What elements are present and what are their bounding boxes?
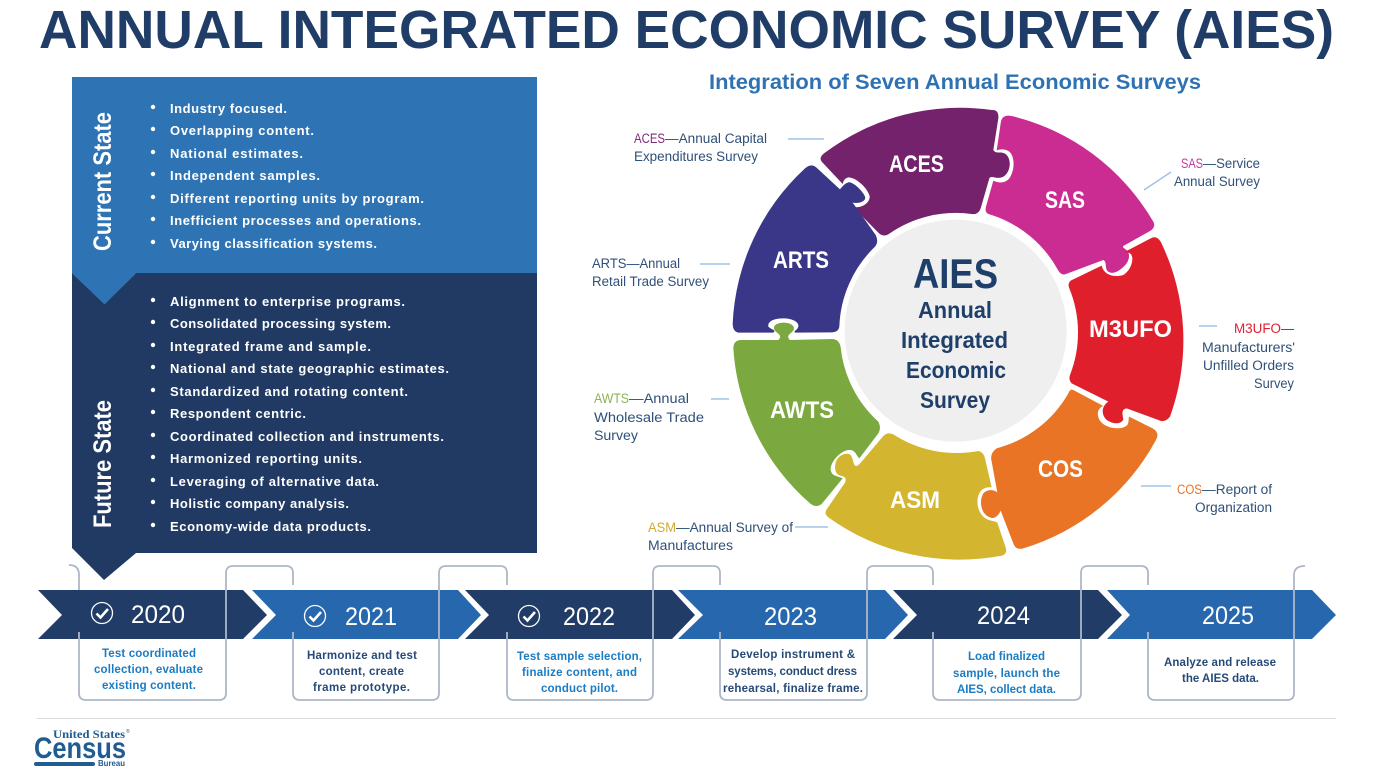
list: future state bullets: Coordinated collection and instruments.	[170, 429, 444, 444]
callout: ACES: ACES	[634, 131, 665, 146]
wheel labels: ASM	[890, 487, 940, 514]
list: future state bullets: National and state geographic estimates.	[170, 361, 449, 376]
brackets connecting steps	[69, 565, 1305, 700]
caption: 2020	[94, 648, 203, 692]
timeline	[38, 565, 1336, 700]
centre text: Integrated	[901, 327, 1008, 353]
callout: COS: COS	[1177, 482, 1202, 497]
list: current state bullets: Independent samples.	[170, 168, 320, 183]
callout: AWTS: Survey	[594, 428, 638, 443]
panel: future state	[72, 272, 537, 580]
list: future state bullets: Holistic company analysis.	[170, 496, 349, 511]
year labels: 2025	[1202, 602, 1254, 630]
callout: AWTS: Wholesale Trade	[594, 410, 704, 425]
wheel labels	[770, 151, 1172, 514]
year labels	[131, 601, 1254, 631]
caption: 2020: collection, evaluate	[94, 664, 203, 676]
chevron: 2021	[252, 590, 481, 639]
callout: ARTS	[592, 256, 730, 289]
list: future state bullets: Harmonized reporting units.	[170, 451, 362, 466]
list: current state bullets: Industry focused.	[170, 101, 287, 116]
list: current state bullets: National estimates.	[170, 146, 303, 161]
callout: M3UFO: M3UFO	[1234, 321, 1281, 336]
caption: 2023: systems, conduct dress	[728, 666, 857, 678]
logo: United States Census Bureau: ®	[126, 728, 130, 735]
year labels: 2024	[977, 602, 1030, 630]
wheel labels: AWTS	[770, 397, 834, 424]
piece: AWTS	[733, 323, 880, 506]
callout: M3UFO: —	[1281, 321, 1294, 336]
wheel labels: ACES	[889, 151, 944, 178]
list: future state bullets: Alignment to enterprise programs.	[170, 294, 405, 309]
year labels: 2021	[345, 603, 397, 631]
icon: check 2022	[518, 606, 540, 626]
callout: SAS: SAS	[1181, 156, 1203, 171]
wheel labels: M3UFO	[1089, 316, 1172, 343]
caption: 2022: Test sample selection,	[517, 651, 642, 663]
list: current state bullets: Inefficient processes and operations.	[170, 213, 421, 228]
caption: 2024: Load finalized	[968, 651, 1045, 663]
callout: M3UFO: Manufacturers'	[1202, 340, 1295, 355]
callout: AWTS: —Annual	[629, 391, 689, 406]
centre circle	[845, 220, 1067, 442]
caption: 2025	[1164, 657, 1276, 685]
callout: SAS: —Service	[1203, 156, 1260, 171]
piece: ACES	[821, 108, 1010, 236]
icon: check 2021	[304, 606, 326, 626]
caption: 2024	[953, 651, 1060, 696]
caption: 2024: AIES, collect data.	[957, 684, 1056, 696]
piece: M3UFO	[1069, 237, 1183, 423]
callout: COS	[1141, 482, 1272, 515]
callout: ACES: Expenditures Survey	[634, 149, 758, 164]
heading: future state: Future State	[89, 400, 117, 528]
callout: COS: Organization	[1195, 500, 1272, 515]
list: future state bullets: Integrated frame and sample.	[170, 339, 371, 354]
piece: ASM	[826, 433, 1006, 560]
arrow: current state pointer	[72, 272, 137, 304]
caption: 2023: Develop instrument &	[731, 649, 855, 661]
callout: SAS: Annual Survey	[1174, 174, 1260, 189]
caption: 2022: conduct pilot.	[541, 683, 618, 695]
piece: ARTS	[733, 165, 877, 333]
callout: ASM: Manufactures	[648, 538, 733, 553]
logo: United States Census Bureau: Census	[34, 732, 126, 765]
callout: ACES	[634, 131, 824, 164]
chevron: 2023	[678, 590, 908, 639]
callout: M3UFO: Unfilled Orders	[1203, 358, 1294, 373]
list: future state bullets: Respondent centric.	[170, 406, 306, 421]
logo: United States Census Bureau: United States	[53, 727, 125, 741]
caption: 2021: Harmonize and test	[307, 650, 417, 662]
list: future state bullets: Consolidated processing system.	[170, 316, 391, 331]
caption: 2020: Test coordinated	[102, 648, 196, 660]
callout: ASM: —Annual Survey of	[676, 520, 793, 535]
callout: ASM: ASM	[648, 520, 676, 535]
chevron: 2024	[893, 590, 1122, 639]
callout: ARTS: ARTS—Annual	[592, 256, 680, 271]
callout: ARTS: Retail Trade Survey	[592, 274, 709, 289]
callout: ASM	[648, 520, 828, 553]
piece: SAS	[986, 116, 1154, 275]
wheel labels: ARTS	[773, 247, 829, 274]
caption: 2021: frame prototype.	[313, 682, 410, 694]
callout: COS: —Report of	[1202, 482, 1272, 497]
list: future state bullets	[151, 294, 449, 534]
chevron: 2025	[1107, 590, 1336, 639]
caption: 2025: the AIES data.	[1182, 673, 1259, 685]
caption: 2024: sample, launch the	[953, 668, 1060, 680]
callout: M3UFO: Survey	[1254, 376, 1294, 391]
caption: 2022: finalize content, and	[522, 667, 637, 679]
wheel: seven survey puzzle pieces	[733, 108, 1183, 560]
year labels: 2023	[764, 603, 817, 631]
title: ANNUAL INTEGRATED ECONOMIC SURVEY (AIES)	[39, 0, 1334, 60]
callout: AWTS: AWTS	[594, 391, 629, 406]
year labels: 2022	[563, 603, 615, 631]
piece: COS	[981, 390, 1157, 549]
logo: United States Census Bureau: Bureau	[98, 759, 125, 768]
heading: current state: Current State	[89, 112, 117, 251]
list: current state bullets: Overlapping content.	[170, 123, 314, 138]
centre text: Survey	[920, 387, 990, 413]
callout: SAS	[1144, 156, 1260, 190]
icon: check 2020	[92, 602, 112, 624]
caption: 2022	[517, 651, 642, 695]
list: current state bullets: Varying classification systems.	[170, 236, 377, 251]
callout: AWTS	[594, 391, 729, 443]
wheel labels: COS	[1038, 456, 1083, 483]
panel: current state	[72, 77, 537, 274]
caption: 2020: existing content.	[102, 680, 196, 692]
callout: M3UFO	[1199, 321, 1295, 391]
list: future state bullets: Standardized and rotating content.	[170, 384, 408, 399]
list: future state bullets: Leveraging of alternative data.	[170, 474, 379, 489]
list: current state bullets: Different reporting units by program.	[170, 191, 424, 206]
caption: 2023: rehearsal, finalize frame.	[723, 683, 863, 695]
centre text: AIES	[913, 250, 998, 297]
chevron: 2022	[465, 590, 695, 639]
callout: ACES: —Annual Capital	[665, 131, 767, 146]
list: current state bullets	[151, 101, 424, 251]
wheel labels: SAS	[1045, 187, 1085, 214]
centre text: Economic	[906, 357, 1006, 383]
caption: 2025: Analyze and release	[1164, 657, 1276, 669]
wheel heading: Integration of Seven Annual Economic Surveys	[709, 71, 1201, 94]
caption: 2021: content, create	[319, 666, 404, 678]
caption: 2023	[723, 649, 863, 695]
centre text: Annual	[918, 297, 992, 323]
chevron: 2020	[38, 590, 267, 639]
list: future state bullets: Economy-wide data products.	[170, 519, 371, 534]
caption: 2021	[307, 650, 417, 694]
centre text	[901, 250, 1008, 413]
year labels: 2020	[131, 601, 185, 629]
